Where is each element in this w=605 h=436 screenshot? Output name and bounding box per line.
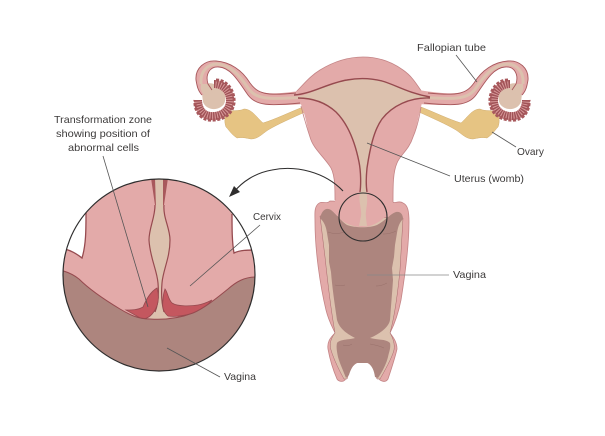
lens circle on cervix [339,193,387,241]
label: Fallopian tube: Fallopian tube [417,42,486,54]
cervical canal [150,180,170,319]
label: Cervix: Cervix [253,211,282,223]
leader line: Transformation zone [103,156,148,307]
leader line: Ovary [492,132,516,147]
abnormal cells, right [163,289,212,316]
magnified cervix circle [55,178,262,380]
label: Transformation zone: showing position of [56,128,150,140]
label: Ovary: Ovary [517,146,545,158]
anatomy diagram [195,57,529,381]
uterus outline [294,57,424,202]
left ovary [225,107,305,139]
vagina region [64,270,254,370]
top of canal red wedge [151,178,168,205]
left fallopian tube [195,61,306,120]
label: Transformation zone [54,114,152,154]
label: Transformation zone: abnormal cells [68,142,139,154]
vagina outer wall [315,201,409,381]
uterus body [295,57,423,227]
leader line: Fallopian tube [456,55,477,82]
right ovary [419,107,499,139]
vaginal cavity [320,209,403,378]
leader line: Vagina inset [167,348,220,377]
label: Transformation zone: Transformation zone [54,114,152,126]
white background notches [67,214,86,257]
arrow from lens to magnified circle [229,168,343,197]
label: Vagina main: Vagina [453,269,486,281]
vaginal lining [320,216,403,379]
leader line: Uterus [367,143,450,176]
label: Vagina inset: Vagina [224,371,256,383]
label: Uterus (womb): Uterus (womb) [454,173,524,185]
leader line: Cervix [190,225,260,286]
uterine cavity edge lines [294,79,430,192]
uterine cavity [296,78,428,226]
leader line: Vagina main [367,274,449,276]
abnormal cells, left [126,288,158,319]
right fallopian tube [418,61,529,120]
